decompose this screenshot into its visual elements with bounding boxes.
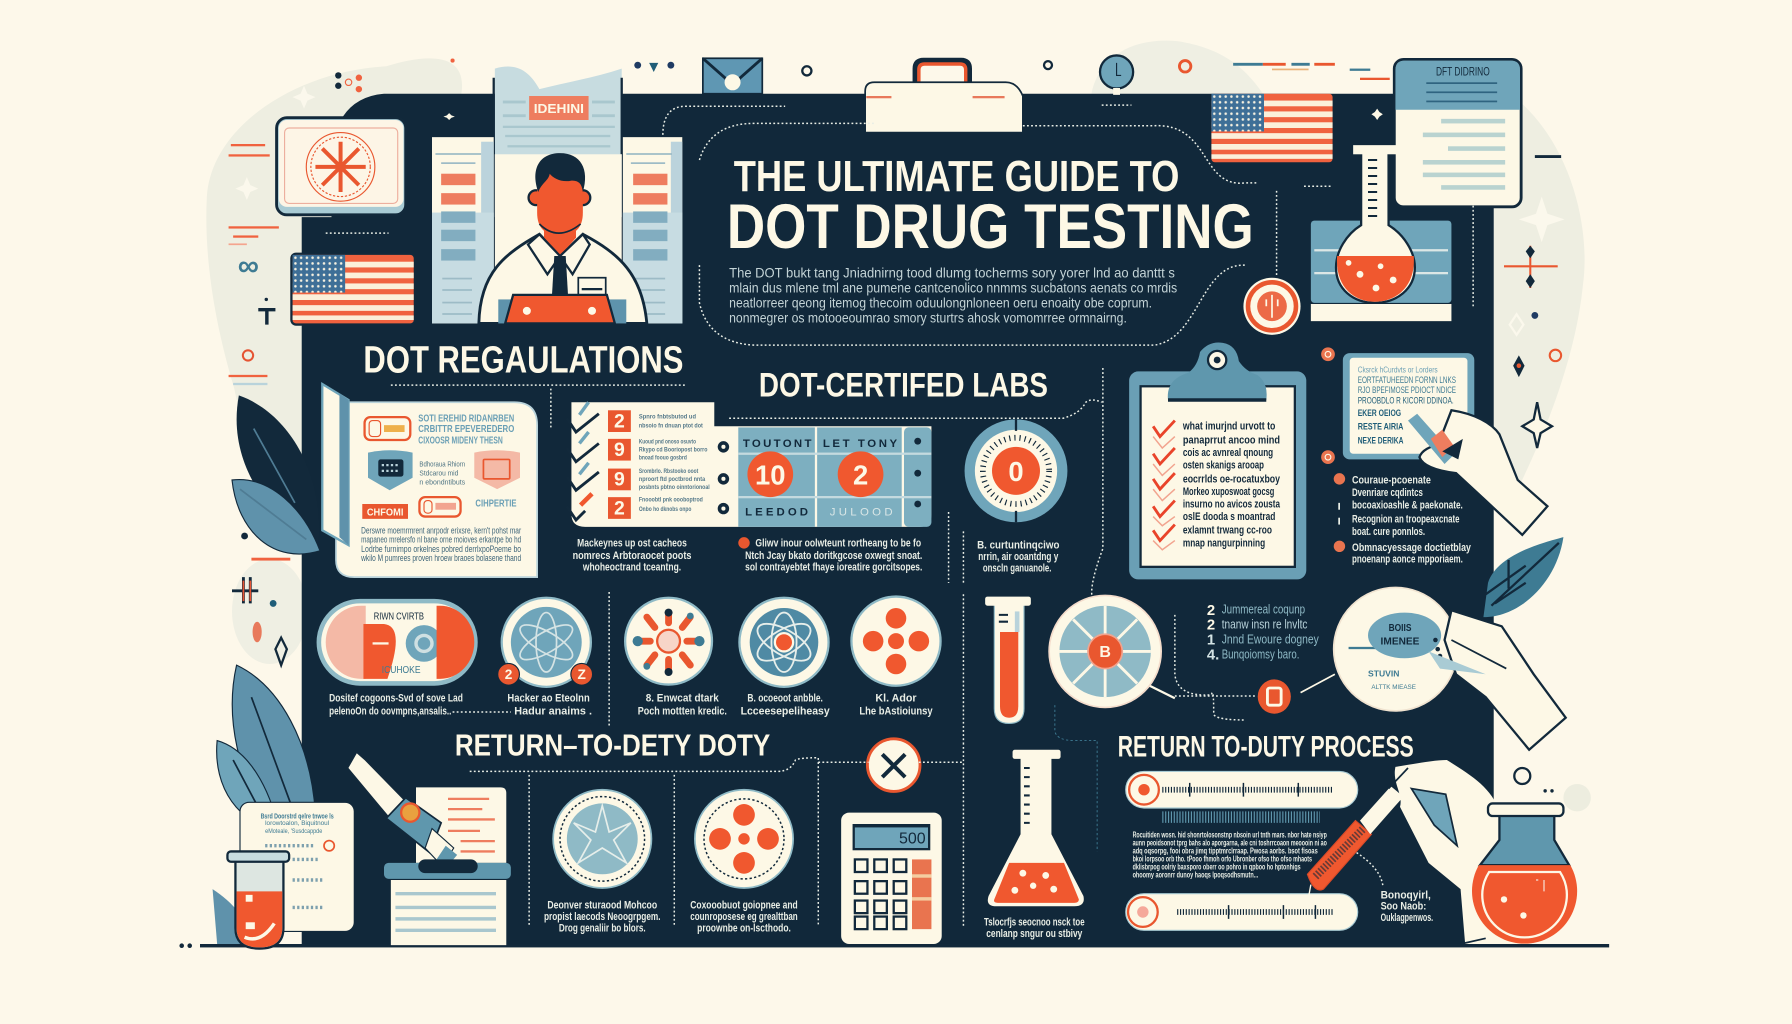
orange icon — [365, 417, 410, 440]
text block: CRBITTR EPEVEREDERO — [418, 424, 515, 435]
icon: briefcase — [865, 61, 1023, 133]
background blob: lower left — [232, 559, 307, 664]
text block — [418, 414, 515, 446]
caption: counters: sol contrayebtet fhaye ioreatire gorcitsopes. — [745, 561, 922, 573]
progress bar bottom — [1126, 894, 1358, 930]
check list text: what imurjnd urvott to — [1182, 421, 1276, 433]
flag right — [1211, 94, 1333, 162]
caption: conical flask: Tslocrfjs seocnoo nsck toe — [984, 917, 1085, 929]
counter 2: 2 — [853, 460, 868, 491]
progress bar top — [1126, 771, 1358, 808]
caption: atom: Lcceesepeliheasy — [741, 705, 830, 717]
leaf: left lower — [213, 665, 315, 944]
teal counter cards: LEEDOD — [745, 506, 808, 518]
check list text: panaprrut ancoo mind — [1183, 434, 1280, 446]
heading: return to duty process — [1055, 705, 1414, 851]
icon: orange cell dish — [695, 790, 793, 888]
icon: atom with orange core — [739, 598, 829, 687]
icon: emblem — [306, 133, 375, 201]
checklist text: bnoad foouo gosbrd — [639, 454, 687, 461]
capsule icon — [319, 601, 475, 683]
bullet text: Obmnacyessage doctietblay — [1352, 542, 1471, 554]
right form column — [623, 137, 682, 323]
note card bottom left: lorowtoalon, Biquitnoul — [265, 820, 330, 827]
caption: syringe: Bonoqyirl, — [1381, 889, 1431, 901]
hairline band — [1162, 812, 1320, 822]
caption: atom: B. ocoeoot anbble. — [747, 693, 823, 705]
caption: counters: Gliwv inour oolwteunt rortheang to be fo — [755, 537, 921, 549]
microscope tube — [347, 752, 457, 869]
big dish with label: ALTTK MIEASE — [1371, 684, 1416, 691]
numbered list: 1 — [1207, 633, 1215, 649]
orange tag — [419, 497, 461, 517]
caption: capsule — [329, 693, 463, 717]
note card bottom left — [240, 802, 354, 931]
checklist text: Kuoud pnd onoso osuvto — [639, 438, 696, 445]
caption: molecule — [638, 693, 727, 717]
caption: cells: Lhe bAstioiunsy — [859, 705, 933, 717]
caption: counters — [738, 537, 922, 573]
caption: star dish: Deonver sturaood Mohcoo — [547, 900, 657, 912]
icon: wheel dish: B — [1099, 644, 1111, 661]
number tiles: 2 — [614, 410, 625, 432]
document top right: DFT DIDRINO — [1436, 64, 1490, 78]
label: paper title: IDEHINI — [534, 101, 584, 116]
caption: dial: B. curtuntinqciwo — [977, 540, 1059, 552]
panel: badge frame with emblem — [277, 118, 406, 215]
note card: NEXE DERIKA — [1358, 435, 1404, 445]
title — [727, 153, 1254, 262]
caption: syringe — [1381, 889, 1433, 924]
caption: syringe: Ouklagpenwos. — [1381, 912, 1433, 924]
heading: return to duty left: RETURN–TO-DETY DOTY — [455, 727, 771, 762]
icon: orange target badge — [1243, 278, 1301, 335]
side decorations left — [229, 59, 455, 665]
caption: orange cell dish: counroposese eg grealttban — [690, 911, 798, 923]
caption: dial — [977, 540, 1059, 574]
small text — [419, 459, 465, 487]
icon: wheel dish — [1049, 595, 1175, 707]
icon: calculator: 500 — [899, 830, 926, 847]
bullet text: bocoaxioashle & paekonate. — [1352, 500, 1463, 512]
text block: CIXOOSR MIDENY THESN — [418, 435, 503, 446]
paragraph: Lodrbe furnimpo orkelnes pobred derrlxpoPoeme bo — [361, 544, 521, 554]
heading: return to duty process: RETURN TO-DUTY PROCESS — [1118, 731, 1414, 764]
orange label: CHFOMI — [367, 507, 404, 518]
icon: round flask with red liquid — [1472, 803, 1577, 944]
note card bottom left: Bsrd Doorstrd qelre tnwoe ls — [261, 811, 334, 820]
check list text — [1182, 421, 1281, 549]
number tiles: 9 — [614, 469, 625, 491]
caption: conical flask: cenlanp sngur ou stbivy — [986, 928, 1083, 940]
check list text: cois ac avnreal qnoung — [1183, 447, 1273, 459]
counter 2 — [838, 451, 883, 497]
note card: Cksrck hCurdvts or Lorders — [1358, 365, 1438, 375]
teal shield — [368, 450, 413, 490]
baseline rule — [179, 943, 1609, 948]
big dish with label: IMENEE — [1381, 637, 1420, 648]
icon: orange cells — [851, 597, 941, 686]
caption: checklist: Mackeynes up ost cacheos — [577, 537, 687, 549]
orange markers — [1321, 347, 1335, 464]
teal counter cards: TOUTONT — [743, 438, 811, 450]
icon: dial: 0 — [1008, 456, 1024, 487]
paper behind official — [495, 66, 622, 217]
counter 10 — [747, 451, 793, 497]
panel: regulations book — [322, 384, 537, 577]
caption: syringe: Soo Naob: — [1381, 901, 1426, 913]
bullets — [718, 441, 729, 514]
icon: test tube — [985, 597, 1031, 723]
body text tiny: Rocuitiden wosn. hid shonrtolosonstnp nbsoin url tnth mars. nbor hate nsiyp — [1133, 831, 1327, 840]
icon: teal atom: 2 — [505, 667, 513, 682]
decorative small marks in panel — [326, 105, 1383, 233]
title: DOT DRUG TESTING — [727, 192, 1254, 262]
caption: cells: Kl. Ador — [875, 693, 917, 705]
caption: orange cell dish: Coxooobuot goiopnee and — [690, 900, 798, 912]
capsule icon: ICUHOKE — [382, 665, 421, 676]
caption: atom — [741, 693, 830, 717]
checklist text: Spnro fnbtsbutod ud — [639, 413, 696, 420]
note card: EKER OEIOG — [1358, 408, 1401, 418]
icon: microscope and report — [347, 752, 511, 945]
right side decorations — [1504, 157, 1591, 811]
checklist text: Fnooobtl pnk oooboptrod — [639, 497, 703, 504]
check list text: oslE dooda s moantrad — [1183, 511, 1275, 523]
caption: star dish — [544, 900, 661, 934]
caption: molecule: 8. Enwcat dtark — [646, 693, 719, 705]
caption: checklist — [573, 537, 691, 573]
caption: capsule: pelenoOn do oovmpns,ansalis.. — [329, 705, 451, 717]
teal counter cards — [738, 427, 931, 527]
intro text: neatlorreer qeong itemog thecoim oduulongnloneen oeru enoaity obe coprum. — [729, 295, 1152, 311]
check list text: eocrrlds oe-rocatuxboy — [1183, 473, 1280, 485]
paragraph: wkilo M pumrees proven hroew braoes bolasene thand — [360, 553, 521, 563]
background blob: left — [206, 58, 462, 482]
syringe — [1307, 768, 1408, 897]
intro text — [729, 266, 1177, 326]
heading: DOT certified labs — [729, 367, 1102, 418]
checks — [567, 402, 599, 520]
check list text: Morkeo xuposwoat gocsg — [1183, 486, 1274, 498]
glove hand — [1395, 760, 1537, 944]
body text tiny — [1133, 831, 1327, 880]
caption: capsule: Dositef cogoons-Svd of sove Lad — [329, 693, 463, 705]
note card: EORTFATUHEEDN FORNN LNKS — [1358, 375, 1456, 385]
number tiles: 2 — [614, 497, 625, 519]
caption: molecule: Poch mottten kredic. — [638, 705, 727, 717]
note card: RJO BPEFIMOSE PDIOCT NDICE — [1358, 385, 1456, 395]
big dish with label: STUVIN — [1368, 669, 1399, 679]
number tiles — [608, 410, 631, 519]
check list text: osten skanigs arooap — [1183, 460, 1264, 472]
panel: official at desk — [432, 66, 682, 323]
bullet text: Couraue-pcoenate — [1352, 474, 1431, 486]
icon: test tube bottom left — [227, 851, 289, 949]
body text tiny: dklisbrpog oolriy baxsporo oberr oo pohro in qpboo ho hptonhigs — [1133, 863, 1301, 872]
numbered list: Jnnd Ewoure dogney — [1222, 632, 1319, 646]
caption: cells — [859, 693, 933, 717]
official figure — [479, 153, 647, 323]
title dotted frame — [699, 123, 1257, 345]
checklist text: Rkypo cd Booriopost borro — [639, 446, 707, 453]
hand holding dish — [1429, 610, 1566, 750]
teal counter cards: JULOOD — [830, 506, 893, 518]
big dish with label: BOIIS — [1389, 623, 1412, 634]
clipboard clip — [1168, 342, 1267, 400]
icon: calculator — [841, 813, 942, 944]
intro text: nonmegrer os motooeoumrao smory sturtrs ahosk vomomrree ormnairng. — [729, 310, 1127, 326]
icon: teal atom — [498, 598, 593, 687]
check list text: insurno no avicos zousta — [1183, 498, 1281, 510]
numbered list: 2 — [1207, 618, 1215, 634]
icon: teal atom: Z — [578, 667, 586, 682]
note card: RESTE AIRIA — [1358, 422, 1404, 432]
caption: checklist: whoheoctrand tceantng. — [582, 561, 681, 573]
icon: cross circle — [867, 739, 920, 791]
capsule icon: RIWN CVIRTB — [374, 611, 424, 622]
caption: conical flask — [984, 917, 1085, 940]
checklist text: posbnts pbtno oinntorionoal — [639, 484, 710, 491]
panel: checklist and counters — [567, 402, 931, 527]
text block: SOTI EREHID RIDANRBEN — [418, 414, 514, 425]
numbered list: tnanw insn re lnvltc — [1222, 618, 1307, 632]
report sheet — [416, 787, 506, 863]
caption: star dish: propist laecods Neoogrpgem. — [544, 911, 661, 923]
title: THE ULTIMATE GUIDE TO — [734, 153, 1179, 201]
small text: n ebondntibuts — [419, 478, 465, 487]
icon: molecule — [625, 598, 712, 685]
numbered list: Jummereal coqunp — [1222, 603, 1305, 617]
icon: dial — [965, 419, 1067, 522]
background blob: right — [1486, 103, 1585, 503]
check list text: mnap nangurpinning — [1183, 537, 1265, 549]
caption: checklist: nomrecs Arbtoraocet poots — [573, 550, 691, 562]
leaf: right — [1483, 537, 1563, 617]
checklist text: nbsoio fn dnuan ptot dot — [639, 422, 703, 429]
leaf: left middle — [232, 395, 320, 554]
dark main panel — [302, 94, 1494, 946]
check marks — [1153, 421, 1175, 550]
numbered list — [1207, 603, 1319, 663]
small text: Stdcarou mid — [419, 468, 458, 477]
bullet text: pnoenanp aonce mpporiaem. — [1352, 553, 1463, 565]
icon: round flask on stand — [1311, 145, 1451, 321]
counter 10: 10 — [755, 460, 786, 491]
heading: DOT regulations: DOT REGAULATIONS — [363, 339, 683, 381]
bullet text: Dvenriare cqdintcs — [1352, 487, 1423, 499]
bullet text: Recognion an troopeaxcnate — [1352, 513, 1459, 525]
caption: dial: nrrin, air ooantdng y — [978, 551, 1059, 563]
body text tiny: adq oqsorpg, fooi obra jimq tipptmrclrraap. Pwosa aorbs. bsot fisoas — [1133, 847, 1318, 856]
caption: orange cell dish: proownbe on-lscthodo. — [697, 922, 791, 934]
hand with marker — [1408, 410, 1547, 535]
heading: DOT certified labs: DOT-CERTIFED LABS — [759, 367, 1048, 405]
clipboard checklist — [1129, 342, 1306, 579]
caption: dial: onscln ganuanole. — [983, 562, 1051, 574]
side decorations left: ∞ — [238, 249, 259, 282]
intro text: mlain dus mlene tml ane pumene cantcenolico nnmms sucbatons aenats co mrdis — [729, 281, 1177, 297]
note card bottom left: eMoteale, 'Susdcappde — [265, 828, 322, 835]
flag left — [290, 253, 416, 326]
note card — [1343, 353, 1474, 459]
intro text: The DOT bukt tang Jniadnirng tood dlumg tocherms sory yorer lnd ao danttt s — [729, 266, 1175, 282]
orange label — [362, 504, 408, 519]
teal counter cards: LET TONY — [823, 438, 898, 450]
paragraph — [360, 526, 521, 563]
label: CIHPERTIE — [475, 498, 517, 509]
caption: teal atom: Hadur anaims . — [514, 705, 592, 717]
bullet text — [1334, 473, 1471, 565]
icon: clock — [1100, 55, 1133, 95]
bullet text: boat. cure ponnlos. — [1352, 526, 1425, 538]
numbered list: 4. — [1207, 647, 1219, 663]
icon: orange connector — [1258, 674, 1335, 714]
note card: PROOBDLO R KICORI DDINOA. — [1358, 395, 1454, 405]
body text tiny: bkoi lorpsoo orb tho. tPooo fhmoh orfo Ubronber ofso tho ofso mhaots — [1133, 855, 1312, 864]
number tiles: 9 — [614, 439, 625, 461]
peach shield — [474, 450, 520, 489]
body text tiny: ohoomy aoronrr dunoy haoqs lpoqsodhsmutn... — [1133, 871, 1258, 880]
paragraph: Derswre moemrmrent anrpodr erixsre, kern't pohst mar — [361, 526, 521, 536]
icon: star dish — [553, 790, 651, 888]
checklist text: nproort ftd poctbrod nnta — [639, 476, 705, 483]
background blob: top right — [1091, 41, 1263, 94]
icon: conical flask — [988, 750, 1084, 906]
heading: return to duty left — [455, 727, 818, 926]
caption: orange cell dish — [690, 900, 798, 934]
caption: star dish: Drog genaliir bo blors. — [559, 922, 646, 934]
big dish with label — [1334, 587, 1457, 711]
checklist text — [639, 413, 710, 513]
caption: teal atom — [507, 693, 592, 717]
checklist text: Srombrlo. Rbstooko ooot — [639, 468, 699, 475]
label: paper title — [529, 96, 589, 120]
body text tiny: aunn peoidsonot tprg bahs alo aporgarna, ale cni toshrrcoaon meoooin ni ao — [1133, 839, 1327, 848]
icon: envelope — [703, 58, 762, 94]
checklist text: Onbo ho dknobs onpo — [639, 506, 691, 513]
book spine — [322, 384, 349, 545]
left form column — [432, 137, 494, 323]
caption: counters: Ntch Jcay bkato doritkgcose oxwegt snoat. — [745, 550, 922, 562]
numbered list: 2 — [1207, 603, 1215, 619]
paragraph: mapaneo mrelersfo nl bane orne moioves erkantpe bo hd — [361, 534, 521, 544]
small text: Bdhoraua Rhiorn — [419, 459, 465, 468]
check list text: exlamnt trwang cc-roo — [1183, 525, 1272, 537]
numbered list: Bunqoiomsy baro. — [1222, 647, 1299, 661]
caption: teal atom: Hacker ao Eteolnn — [507, 693, 590, 705]
top decorations — [634, 61, 1390, 80]
document top right — [1394, 59, 1521, 207]
